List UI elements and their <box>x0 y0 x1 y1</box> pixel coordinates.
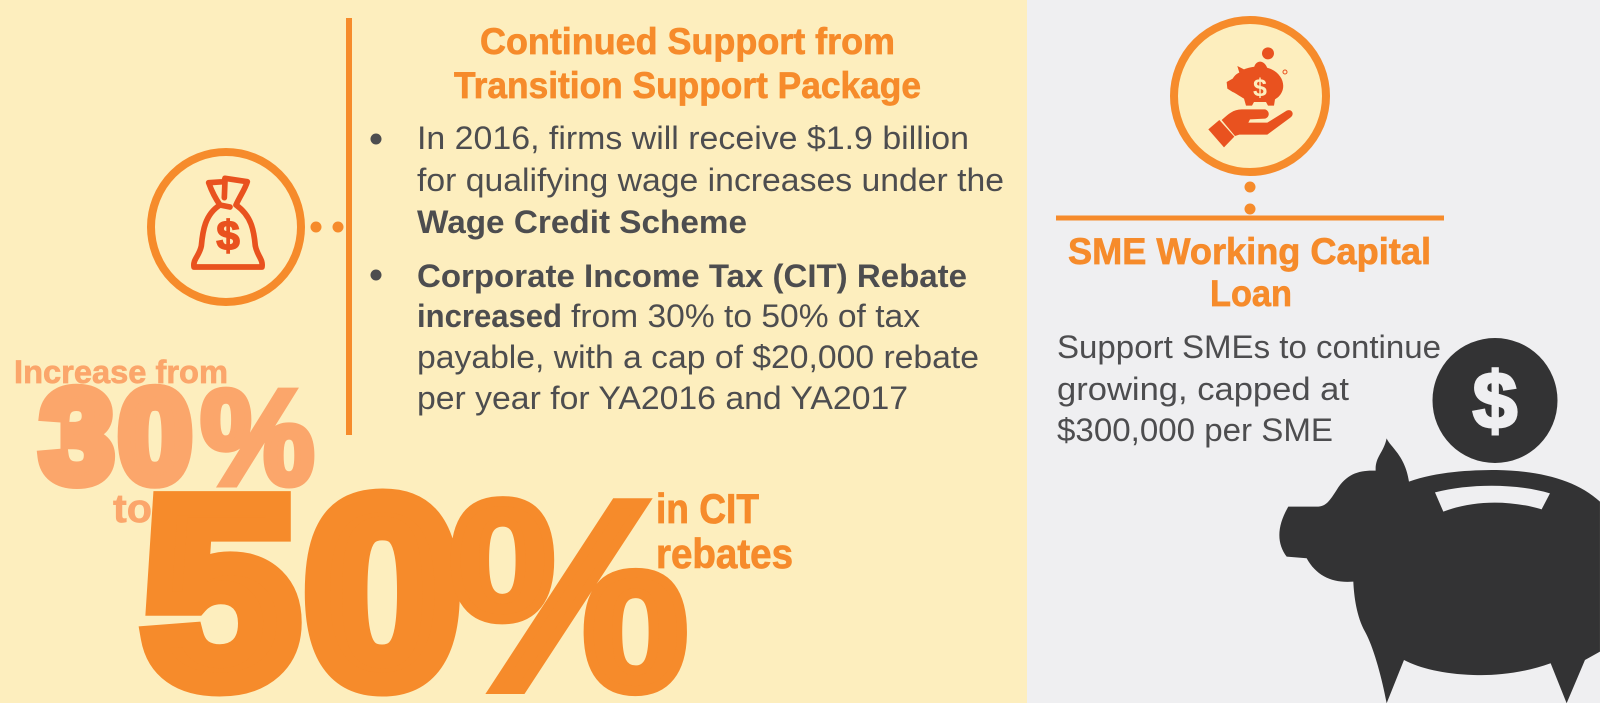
panel: grey background <box>1027 0 1600 703</box>
divider line <box>1056 216 1444 220</box>
bullet: wage credit scheme: Wage Credit Scheme <box>417 204 747 240</box>
label: in CIT rebates: in CIT <box>656 485 759 532</box>
heading: continued support: Continued Support from <box>480 21 895 62</box>
icon: piggy bank on hand in circle <box>1174 20 1326 172</box>
text block: SME description: Support SMEs to continue <box>1057 329 1441 365</box>
text block: SME description <box>1057 329 1441 448</box>
connector dots <box>1244 182 1256 214</box>
panel: SME working capital loan <box>1056 20 1600 703</box>
icon: large piggy bank <box>1279 438 1600 703</box>
bullet: CIT rebate: per year for YA2016 and YA2017 <box>417 380 908 416</box>
bullet list <box>370 120 1004 416</box>
label: in CIT rebates <box>656 485 793 577</box>
heading: SME working capital loan <box>1068 231 1431 314</box>
text block: SME description: growing, capped at <box>1057 371 1349 407</box>
label: increase from: Increase from <box>14 354 228 390</box>
heading: continued support: Transition Support Package <box>454 65 921 106</box>
bullet: CIT rebate: increased <box>417 298 562 334</box>
icon: coin above pig <box>1432 338 1558 463</box>
panel: cream background <box>0 0 1027 703</box>
bullet: CIT rebate: from 30% to 50% of tax <box>571 298 920 334</box>
stat: 30 to 50 percent <box>14 354 793 705</box>
panel: transition support package <box>151 18 1004 435</box>
bullet: CIT rebate <box>370 258 979 416</box>
heading: SME working capital loan: Loan <box>1210 273 1292 314</box>
heading: continued support <box>454 21 921 106</box>
text block: SME description: $300,000 per SME <box>1057 412 1333 448</box>
bullet: CIT rebate: Corporate Income Tax (CIT) Rebate <box>417 258 967 294</box>
icon: piggy bank on hand in circle: $ <box>1253 74 1267 102</box>
label: in CIT rebates: rebates <box>656 530 793 577</box>
label: to: to <box>113 487 152 531</box>
number: 30%: % <box>200 362 314 513</box>
number: 30%: 30 <box>41 363 191 509</box>
connector dots <box>310 222 344 232</box>
number: 50% <box>145 446 689 705</box>
number: 30% <box>41 362 314 513</box>
bullet: wage credit scheme: In 2016, firms will receive $1.9 billion <box>417 120 969 156</box>
icon: money bag in circle <box>151 152 301 302</box>
icon: coin above pig: $ <box>1473 356 1517 445</box>
heading: SME working capital loan: SME Working Capital <box>1068 231 1431 272</box>
icon: money bag in circle: $ <box>216 212 240 259</box>
bullet: CIT rebate: payable, with a cap of $20,000 rebate <box>417 339 979 375</box>
bullet: wage credit scheme <box>370 120 1004 240</box>
vertical divider <box>346 18 352 435</box>
bullet: wage credit scheme: for qualifying wage increases under the <box>417 162 1004 198</box>
